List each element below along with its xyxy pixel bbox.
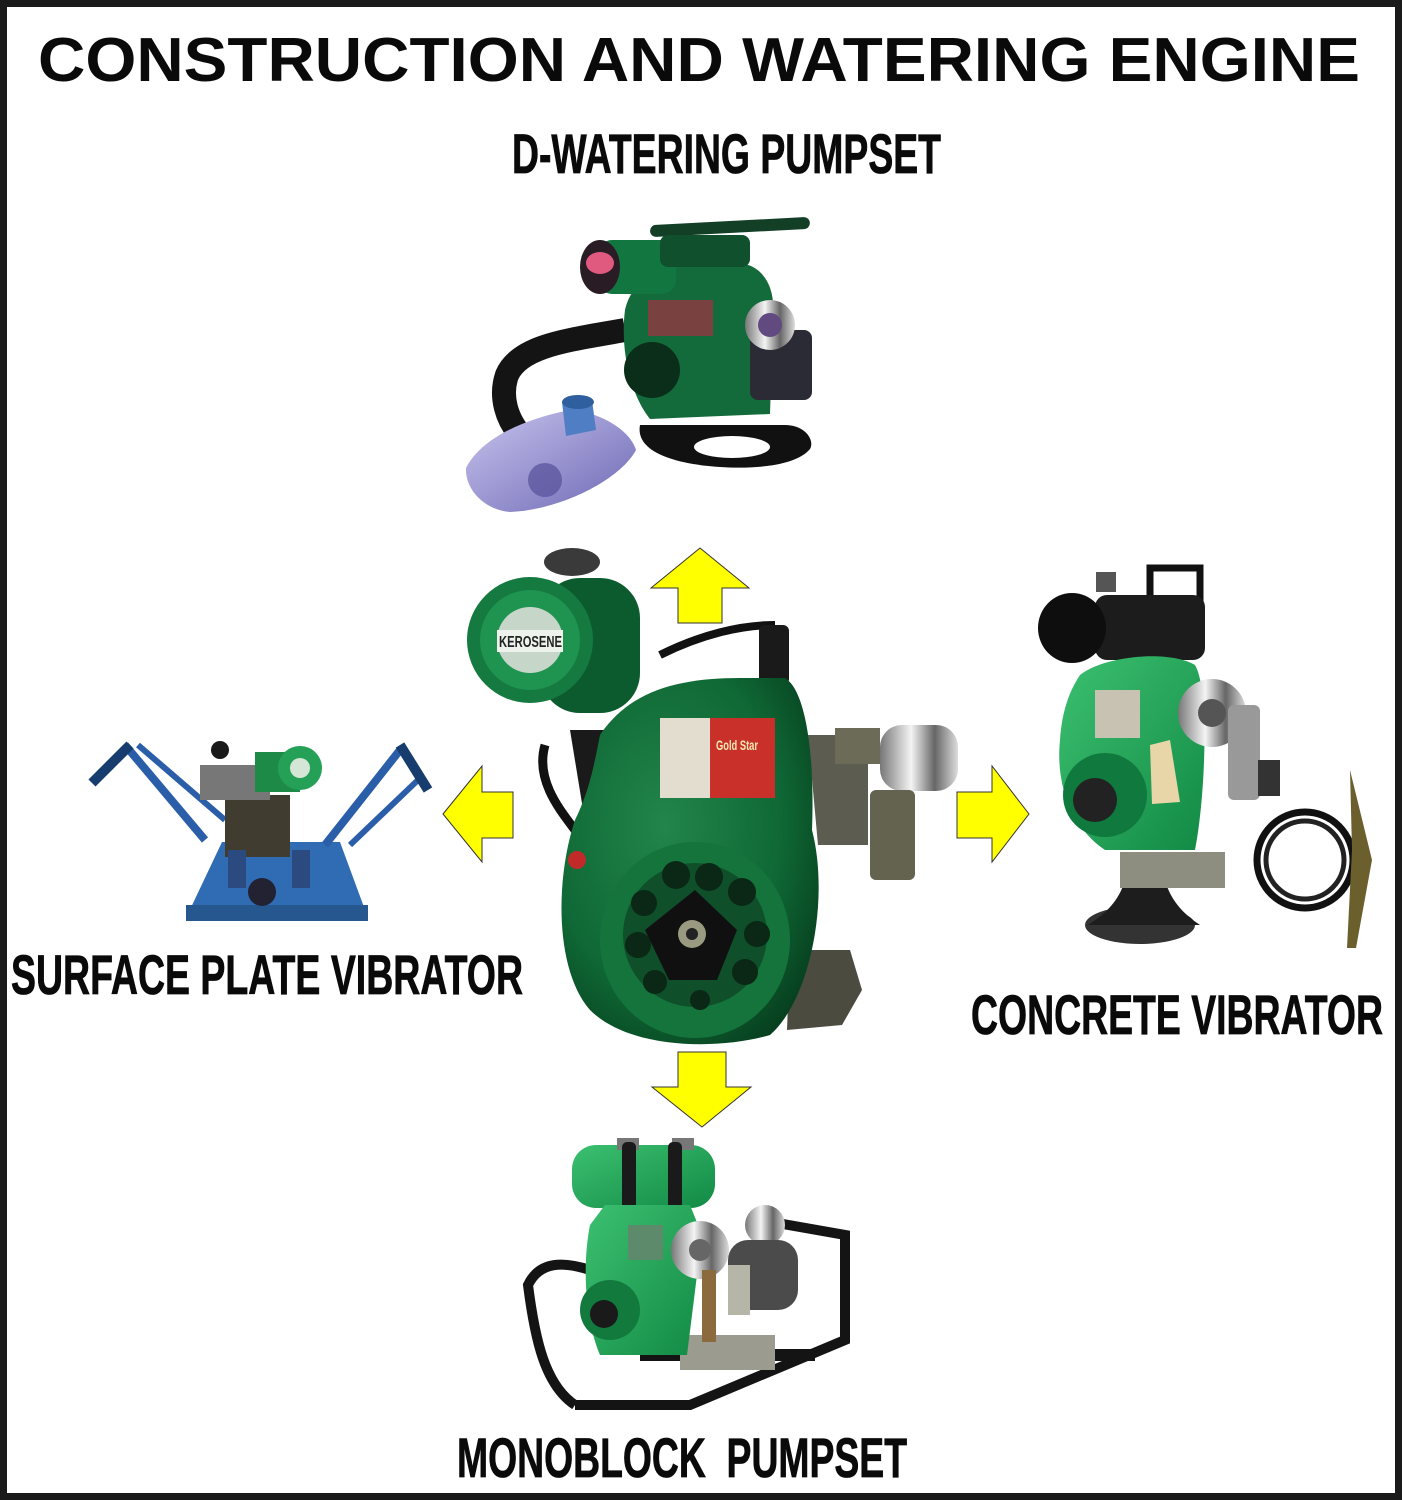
arrow: right [957, 766, 1029, 862]
arrow: up [651, 548, 749, 623]
arrow: left [443, 766, 513, 862]
image: central kerosene engine [467, 548, 958, 1044]
image: d-watering pumpset [466, 217, 812, 512]
image: monoblock pumpset [528, 1138, 845, 1405]
image: central kerosene engine: KEROSENE [499, 634, 562, 651]
heading: surface plate vibrator: SURFACE PLATE VIBRATOR [11, 943, 523, 1006]
image: concrete vibrator [1038, 568, 1372, 948]
title: CONSTRUCTION AND WATERING ENGINE [38, 26, 1360, 95]
image: central kerosene engine: Gold Star [716, 737, 758, 753]
image: surface plate vibrator [92, 741, 428, 921]
heading: d-watering pumpset: D-WATERING PUMPSET [512, 122, 941, 185]
heading: monoblock pumpset: MONOBLOCK PUMPSET [457, 1426, 907, 1489]
arrow: down [652, 1052, 751, 1127]
